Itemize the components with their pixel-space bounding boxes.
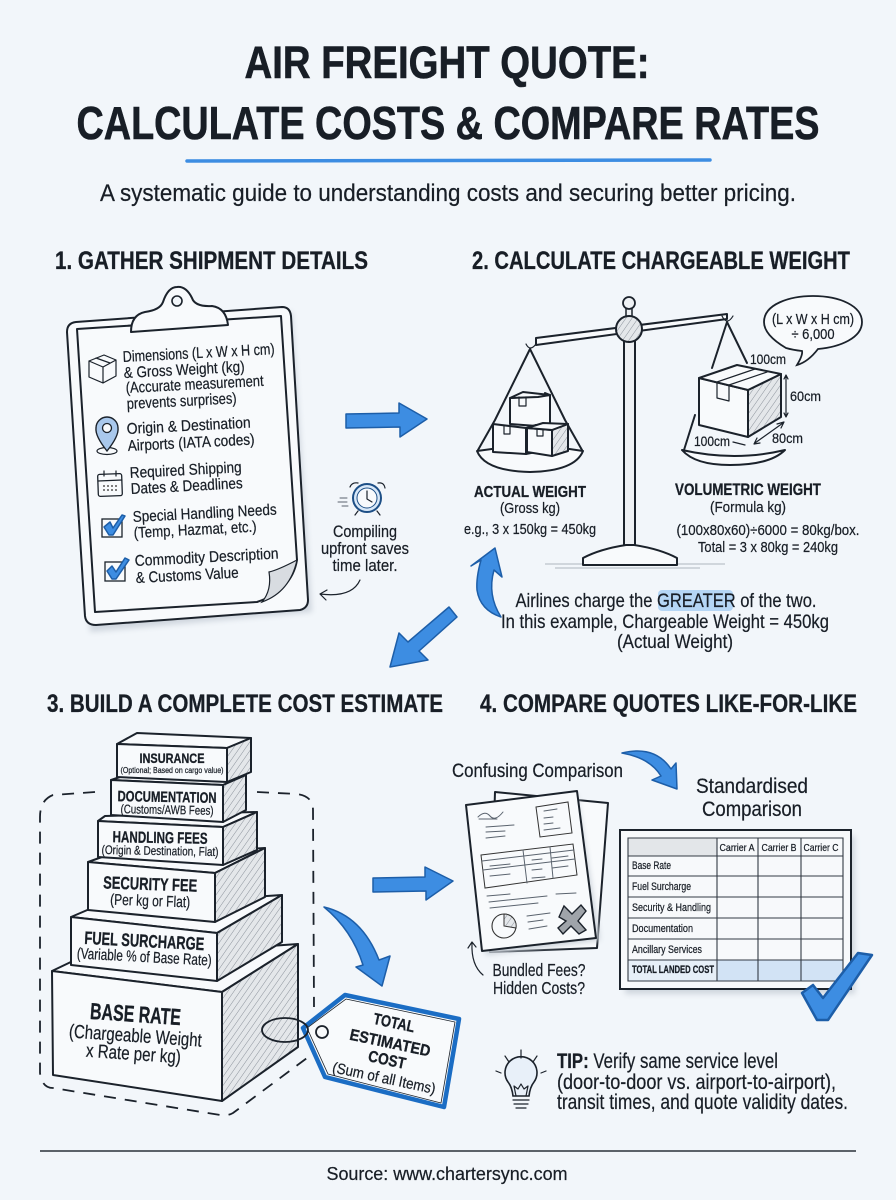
table headers: Carrier A	[720, 842, 754, 854]
speech bubble: formula: (L x W x H cm)	[772, 311, 854, 328]
label: confusing comparison: Confusing Comparison	[452, 761, 623, 782]
scale base shadow	[545, 564, 725, 568]
arrow: stack to total tag	[324, 907, 390, 986]
block: handling fees	[98, 812, 257, 865]
table row labels: Documentation	[632, 923, 693, 935]
clipboard clip	[131, 287, 228, 332]
block: fuel surcharge: FUEL SURCHARGE	[84, 928, 205, 954]
text: commodity	[134, 545, 279, 587]
arrow: curved up to actual weight	[471, 548, 502, 617]
callout: greater of the two: In this example, Chargeable Weight = 450kg	[501, 611, 829, 633]
tag: total estimated cost: COST	[367, 1048, 407, 1073]
table row labels: Security & Handling	[632, 902, 711, 914]
block: base rate: (Chargeable Weight	[68, 1021, 203, 1052]
pie chart icon	[492, 914, 516, 938]
block: base rate: x Rate per kg)	[85, 1041, 182, 1068]
block: insurance: (Optional; Based on cargo value)	[120, 765, 224, 775]
dimension labels: 100cm	[750, 352, 786, 367]
icon: large check mark	[802, 953, 872, 1020]
arrow: step 3 to step 4	[373, 867, 453, 900]
callout: greater of the two	[501, 590, 829, 653]
table row labels	[632, 860, 714, 976]
large carton	[699, 365, 781, 437]
dimension labels: 60cm	[790, 389, 821, 404]
text: dimensions and weight: prevents surprises)	[126, 390, 237, 413]
note: compiling upfront	[321, 523, 409, 575]
text: dates: Dates & Deadlines	[130, 475, 243, 498]
block: handling fees: HANDLING FEES	[112, 829, 208, 848]
table row labels: Ancillary Services	[632, 944, 702, 956]
icon: box	[89, 355, 116, 383]
text: handling: Special Handling Needs	[132, 501, 277, 526]
text: dates: Required Shipping	[129, 459, 242, 482]
scale beam	[536, 314, 727, 345]
block: handling fees: (Origin & Destination, Flat)	[101, 843, 219, 859]
panel: clipboard checklist	[67, 287, 312, 632]
arrow: bundled note to documents	[468, 942, 483, 975]
tip text: TIP: Verify same service level	[557, 1050, 778, 1073]
table row labels: Base Rate	[632, 860, 671, 872]
text: handling: (Temp, Hazmat, etc.)	[133, 519, 257, 542]
dimension labels	[694, 352, 821, 449]
title	[76, 37, 820, 149]
tag string	[262, 1018, 328, 1042]
icon: checkbox	[105, 558, 129, 581]
text: volumetric weight: (Formula kg)	[710, 499, 786, 516]
text: volumetric weight	[675, 481, 860, 556]
text: actual weight: ACTUAL WEIGHT	[474, 484, 586, 501]
subtitle: A systematic guide to understanding costs and securing better pricing.	[100, 180, 796, 207]
note: compiling upfront: Compiling	[333, 523, 397, 541]
text: dimensions and weight: & Gross Weight (kg)	[123, 359, 245, 382]
icon: calendar	[98, 471, 122, 496]
text: actual weight	[464, 484, 596, 538]
source: Source: www.chartersync.com	[326, 1163, 568, 1184]
left pan	[477, 344, 583, 472]
callout: greater of the two: (Actual Weight)	[617, 631, 733, 653]
boxes: three cartons	[493, 392, 568, 456]
dimension arrows	[733, 375, 788, 445]
arrow: note to clipboard	[320, 580, 360, 600]
note: compiling upfront: upfront saves	[321, 540, 409, 558]
speech bubble: formula: ÷ 6,000	[792, 326, 834, 343]
callout: greater of the two: Airlines charge the GREATER of the two.	[516, 590, 816, 612]
text: actual weight: (Gross kg)	[500, 500, 560, 517]
dimension labels: 100cm	[694, 434, 730, 449]
heading: step 3: 3. BUILD A COMPLETE COST ESTIMATE	[47, 690, 443, 718]
dashed boundary	[40, 792, 314, 1115]
text: volumetric weight: VOLUMETRIC WEIGHT	[675, 481, 821, 499]
dimension labels: 80cm	[772, 431, 803, 446]
text: handling	[132, 501, 277, 542]
clipboard board	[67, 307, 308, 625]
text: dates	[129, 459, 243, 498]
block: documentation	[111, 775, 246, 822]
clipboard paper	[77, 316, 297, 612]
block: fuel surcharge	[71, 895, 282, 981]
scale hub	[616, 316, 642, 342]
block: fuel surcharge: (Variable % of Base Rate)	[76, 945, 212, 970]
table header cell	[628, 838, 717, 856]
block: security fee	[88, 848, 265, 922]
table headers: Carrier B	[762, 842, 796, 854]
page curl	[262, 560, 297, 602]
text: dimensions and weight: (Accurate measurement	[125, 373, 265, 397]
panel: comparison table	[620, 830, 855, 994]
text: volumetric weight: (100x80x60)÷6000 = 80kg/box.	[676, 522, 860, 539]
arrow: confusing to standardised	[622, 751, 677, 789]
icon: location pin	[96, 417, 118, 454]
icon: alarm clock	[338, 483, 385, 515]
text: dimensions and weight: Dimensions (L x W x H cm)	[122, 341, 275, 366]
block: base rate	[52, 944, 298, 1101]
title underline	[187, 160, 710, 161]
panel: cost stack	[52, 733, 298, 1101]
heading: step 1: 1. GATHER SHIPMENT DETAILS	[55, 247, 368, 275]
text: dimensions and weight	[122, 341, 275, 413]
text: airports: Origin & Destination	[126, 415, 251, 438]
table headers	[720, 842, 839, 854]
label: standardised comparison	[696, 775, 808, 821]
text: volumetric weight: Total = 3 x 80kg = 240kg	[698, 539, 838, 556]
table row labels: TOTAL LANDED COST	[632, 964, 714, 976]
document lines	[478, 802, 577, 929]
highlight	[658, 590, 733, 611]
block: insurance	[117, 733, 251, 782]
arrow: step 1 to step 2	[346, 403, 427, 437]
block: documentation: DOCUMENTATION	[117, 788, 217, 807]
label: standardised comparison: Standardised	[696, 775, 808, 798]
title: AIR FREIGHT QUOTE:	[244, 37, 650, 88]
text: actual weight: e.g., 3 x 150kg = 450kg	[464, 522, 596, 538]
tag: total estimated cost: (Sum of all Items)	[331, 1059, 437, 1098]
tag: total estimated cost: ESTIMATED	[348, 1027, 432, 1060]
table row labels: Fuel Surcharge	[632, 881, 691, 893]
text: commodity: & Customs Value	[135, 565, 239, 587]
text: commodity: Commodity Description	[134, 545, 279, 570]
icon: cross	[558, 905, 586, 934]
icon: checkbox	[102, 515, 125, 537]
block: documentation: (Customs/AWB Fees)	[120, 802, 214, 818]
label: standardised comparison: Comparison	[702, 798, 802, 821]
icon: light bulb	[496, 1050, 546, 1108]
tag: total estimated cost: TOTAL	[372, 1011, 416, 1036]
arrow: step 2 to step 3	[390, 607, 457, 667]
scale post	[624, 340, 635, 546]
text: airports: Airports (IATA codes)	[127, 431, 255, 455]
block: insurance: INSURANCE	[140, 750, 204, 766]
table grid	[628, 838, 843, 981]
block: security fee: (Per kg or Flat)	[110, 892, 190, 911]
right pan	[682, 316, 788, 465]
note: compiling upfront: time later.	[332, 557, 398, 575]
table headers: Carrier C	[804, 842, 839, 854]
scale knob	[623, 297, 635, 318]
tag: total estimated cost	[262, 995, 459, 1107]
panel: balance scale	[477, 296, 862, 568]
note: bundled fees: Bundled Fees?	[492, 960, 586, 980]
speech bubble: formula	[764, 296, 862, 365]
block: base rate: BASE RATE	[89, 998, 182, 1030]
total row fill	[717, 960, 843, 981]
note: bundled fees	[492, 960, 586, 998]
note: bundled fees: Hidden Costs?	[493, 978, 585, 998]
scale base	[583, 545, 677, 565]
text: airports	[126, 415, 255, 455]
tip text	[557, 1050, 848, 1114]
illustration: messy quote documents	[466, 791, 608, 955]
tip text: (door-to-door vs. airport-to-airport),	[557, 1071, 836, 1094]
footer rule	[40, 1150, 856, 1152]
block: security fee: SECURITY FEE	[103, 872, 198, 896]
